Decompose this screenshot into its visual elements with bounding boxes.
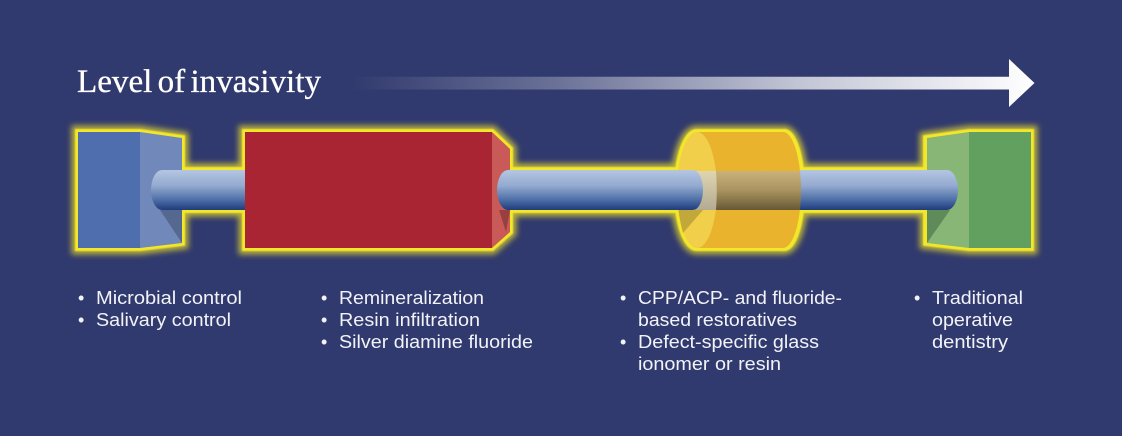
green block — [927, 132, 1031, 248]
text: column 2: • — [321, 288, 327, 308]
text: column 4: operative — [932, 310, 1013, 330]
text: column 2: Resin infiltration — [339, 310, 480, 330]
text: column 1: • — [78, 288, 84, 308]
text: column 3: ionomer or resin — [638, 354, 781, 374]
rod segment from yellow cylinder to green block — [800, 170, 958, 210]
rod segment from blue block to red block — [151, 170, 245, 210]
text: column 3 — [620, 288, 842, 374]
text: column 3: based restoratives — [638, 310, 797, 330]
text: column 1: • — [78, 310, 84, 330]
text: column 2: Remineralization — [339, 288, 484, 308]
text: column 1 — [78, 288, 242, 330]
rod segment from red block to yellow cylinder — [497, 170, 703, 210]
blue block — [78, 132, 182, 248]
text: column 1: Salivary control — [96, 310, 231, 330]
text: column 4: • — [914, 288, 920, 308]
text: column 4 — [914, 288, 1023, 352]
yellow cylinder — [677, 132, 801, 248]
red block — [245, 132, 510, 248]
text: column 2: • — [321, 332, 327, 352]
text: column 3: • — [620, 332, 626, 352]
text: column 3: Defect-specific glass — [638, 332, 819, 352]
text: column 4: dentistry — [932, 332, 1008, 352]
text: column 4: Traditional — [932, 288, 1023, 308]
title: Level of invasivity — [77, 64, 321, 100]
arrow: increasing invasivity — [350, 59, 1034, 107]
text: column 1: Microbial control — [96, 288, 242, 308]
text: column 3: • — [620, 288, 626, 308]
text: column 3: CPP/ACP- and fluoride- — [638, 288, 842, 308]
text: column 2: Silver diamine fluoride — [339, 332, 533, 352]
rod passing through yellow cylinder — [695, 171, 801, 210]
text: column 2: • — [321, 310, 327, 330]
glowing yellow outline of the bar — [78, 132, 1031, 248]
text: column 2 — [321, 288, 533, 352]
